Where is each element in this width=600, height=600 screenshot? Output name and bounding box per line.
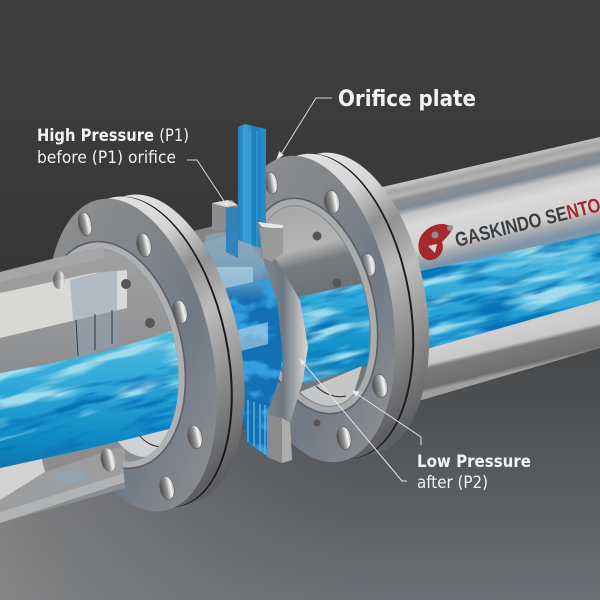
pipe between flanges <box>190 214 262 425</box>
water body <box>0 330 179 468</box>
leader: high pressure <box>187 160 228 207</box>
inner ring <box>68 242 184 468</box>
glass body <box>0 248 178 522</box>
interior rings <box>70 268 117 358</box>
downstream opening interior <box>233 192 391 420</box>
far-side holes <box>121 279 155 328</box>
blue flow disc <box>205 232 282 456</box>
flange: downstream <box>266 152 430 462</box>
leader: low pressure <box>300 359 421 481</box>
water: right section <box>280 233 600 384</box>
leader: orifice plate <box>277 98 332 159</box>
label: high pressure: before (P1) orifice <box>37 148 176 167</box>
bolt holes <box>76 211 204 501</box>
right pipe <box>360 137 600 418</box>
upper-left tab <box>212 200 238 258</box>
hole seen through glass <box>53 271 65 289</box>
blue plate bar <box>238 124 266 250</box>
lower seat <box>118 422 172 457</box>
label: orifice plate: Orifice plate <box>338 87 476 112</box>
label: high pressure: High Pressure (P1) <box>37 126 189 145</box>
logo mark <box>418 224 453 260</box>
flange: upstream <box>52 194 245 512</box>
inner ring <box>266 199 377 413</box>
label: high pressure <box>37 126 189 167</box>
orifice plate <box>205 124 308 463</box>
label: low pressure: after (P2) <box>417 473 488 492</box>
label: low pressure <box>417 452 531 492</box>
lower glass <box>0 445 125 523</box>
left pipe and water <box>0 246 179 523</box>
logo: Gaskindo Sentosa <box>418 189 600 260</box>
label: low pressure: Low Pressure <box>417 452 531 471</box>
crescent plate <box>258 222 308 463</box>
bolt holes <box>263 171 389 451</box>
downstream seat crescent <box>300 366 362 406</box>
far-side holes <box>312 232 342 426</box>
